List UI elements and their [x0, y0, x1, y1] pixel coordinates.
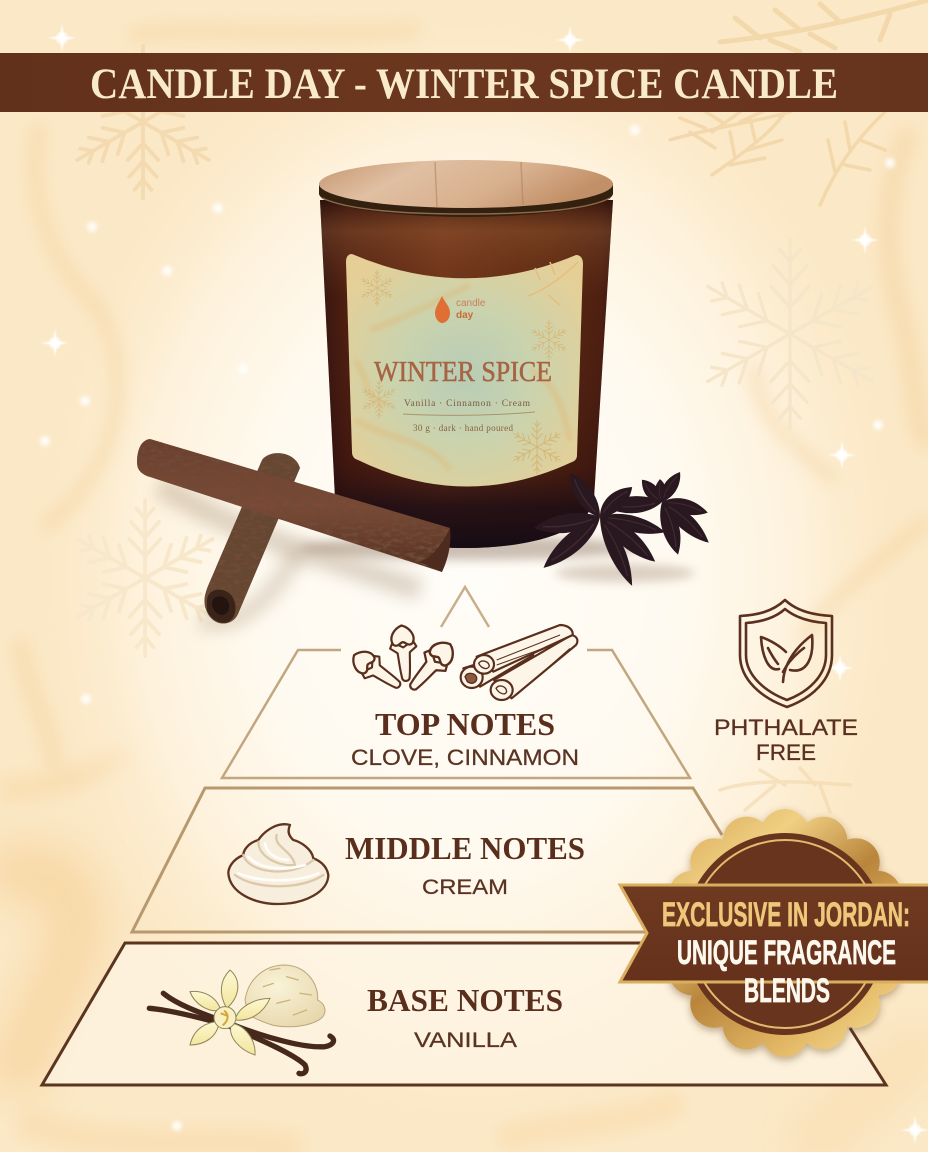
middle tier outline — [132, 788, 722, 932]
cinnamon sticks — [137, 439, 450, 624]
badge text — [662, 896, 910, 1010]
snowflake: right — [698, 239, 882, 429]
vanilla flower — [190, 970, 270, 1055]
icon: cloves — [347, 624, 461, 698]
title: CANDLE DAY - WINTER SPICE CANDLE — [90, 61, 838, 108]
apex — [441, 587, 489, 627]
stick hollow — [207, 590, 235, 623]
lid — [319, 160, 613, 217]
rear stick — [204, 453, 300, 624]
snowflake: upper left — [70, 46, 216, 198]
text: clove, cinnamon: CLOVE, CINNAMON — [351, 745, 579, 770]
label logo: candle — [456, 298, 486, 309]
top tier outline — [222, 650, 690, 778]
label — [346, 254, 583, 487]
text: phthalate free — [714, 715, 858, 765]
rear star — [603, 468, 714, 557]
label logo — [435, 296, 486, 323]
middle notes — [228, 824, 585, 904]
icon: cinnamon bundle — [461, 625, 577, 700]
base tier outline — [42, 943, 886, 1085]
label name: WINTER SPICE — [374, 356, 552, 388]
badge text: BLENDS — [744, 972, 830, 1010]
title banner — [0, 53, 928, 112]
phthalate free — [714, 600, 858, 765]
text: vanilla: VANILLA — [414, 1029, 517, 1052]
badge — [620, 809, 928, 1057]
heading: top notes: TOP NOTES — [375, 706, 555, 742]
pyramid outline — [42, 587, 886, 1085]
star anise — [532, 468, 714, 589]
heading: middle notes: MIDDLE NOTES — [345, 830, 585, 866]
icon: shield with leaves — [740, 600, 832, 707]
label: 30 g · dark · hand poured — [413, 423, 514, 433]
ice cream scoop — [245, 965, 325, 1027]
text: phthalate free: PHTHALATE — [714, 715, 858, 740]
candle jar — [300, 160, 640, 560]
text: cream: CREAM — [422, 876, 508, 899]
front stick — [137, 439, 450, 572]
label: Vanilla · Cinnamon · Cream — [404, 399, 531, 409]
icon: whipped cream — [228, 824, 328, 904]
heading: base notes: BASE NOTES — [367, 982, 563, 1018]
icon: vanilla and ice cream — [149, 965, 334, 1074]
base notes — [149, 965, 563, 1074]
ribbon — [620, 885, 928, 982]
gold seal — [661, 809, 909, 1057]
top notes — [347, 624, 579, 770]
jar shading — [320, 200, 613, 548]
snowflake: lower left — [70, 500, 220, 656]
front star — [532, 469, 667, 589]
winter branches — [670, 0, 928, 812]
jar body — [320, 200, 613, 548]
vanilla pods — [149, 993, 334, 1074]
text: phthalate free: FREE — [756, 740, 816, 765]
label logo: day — [456, 310, 474, 321]
